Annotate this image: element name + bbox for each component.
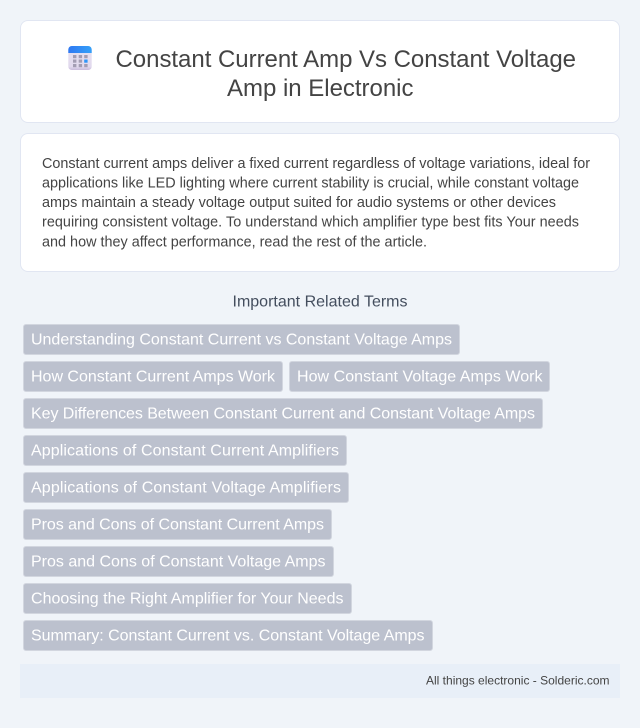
title: Constant Current Amp Vs Constant Voltage	[116, 46, 576, 73]
tag: How Constant Voltage Amps Work	[297, 368, 544, 386]
tag	[23, 398, 543, 429]
tag: Key Differences Between Constant Current and Constant Voltage Amps	[31, 406, 535, 422]
tag	[23, 361, 283, 392]
tag	[23, 472, 349, 503]
tag	[289, 361, 550, 392]
tag	[23, 509, 332, 540]
text block: introduction: and how they affect performance, read the rest of the article.	[42, 234, 427, 250]
panel: introduction	[20, 133, 620, 272]
text block: introduction: requiring consistent voltage. To understand which amplifier type best fits Your needs	[42, 215, 579, 231]
text block: introduction	[42, 156, 590, 250]
tag: Pros and Cons of Constant Voltage Amps	[31, 554, 326, 570]
tag	[23, 435, 347, 466]
footer: All things electronic - Solderic.com	[426, 674, 610, 688]
text block: introduction: amps maintain a steady voltage output suited for audio systems or other devices	[42, 195, 556, 211]
text block: introduction: applications like LED lighting where current stability is crucial, while constant voltage	[42, 176, 579, 192]
heading: related terms: Important Related Terms	[232, 294, 408, 310]
title	[116, 46, 576, 102]
panel: title card	[20, 20, 620, 123]
tag: Understanding Constant Current vs Constant Voltage Amps	[31, 332, 452, 348]
tag: How Constant Current Amps Work	[31, 368, 276, 386]
tag	[23, 324, 460, 355]
tag	[23, 583, 352, 614]
tag: Pros and Cons of Constant Current Amps	[31, 516, 324, 534]
tag: Applications of Constant Voltage Amplifiers	[31, 480, 341, 496]
title: Amp in Electronic	[227, 75, 414, 102]
tag: Applications of Constant Current Amplifiers	[31, 442, 339, 460]
tag	[23, 620, 433, 651]
tag	[23, 546, 334, 577]
tag: Choosing the Right Amplifier for Your Needs	[31, 590, 344, 608]
tag: Summary: Constant Current vs. Constant Voltage Amps	[31, 628, 424, 644]
icon: calendar	[68, 46, 92, 70]
footer	[20, 664, 620, 698]
text block: introduction: Constant current amps deliver a fixed current regardless of voltage variations, ideal for	[42, 156, 590, 172]
